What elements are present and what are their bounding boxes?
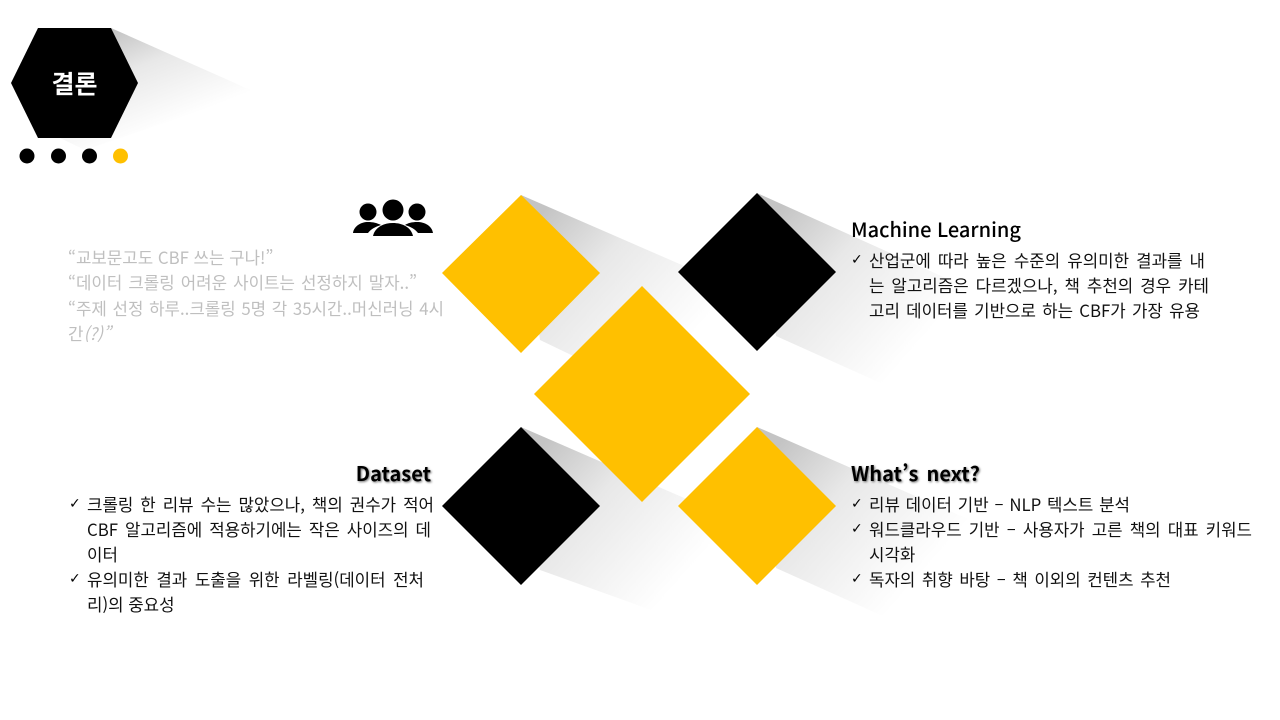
- text block: Machine Learning bullets: ✓: [851, 252, 863, 268]
- diamond: bottom-left black: [442, 427, 600, 585]
- text block: Dataset bullets: CBF 알고리즘에 적용하기에는 작은 사이즈의 데: [87, 517, 431, 541]
- shadow: top-right diamond: [757, 193, 1030, 385]
- text block: Machine Learning bullets: 는 알고리즘은 다르겠으나, 책 추천의 경우 카테: [869, 273, 1209, 297]
- text block: Machine Learning bullets: [851, 248, 1209, 322]
- text block: Dataset bullets: 이터: [87, 542, 118, 566]
- heading: Machine Learning: Machine Learning: [851, 214, 1021, 243]
- text block: Dataset bullets: ✓: [69, 496, 81, 512]
- header hexagon: [11, 28, 138, 138]
- text block: What's next bullets: 시각화: [869, 542, 915, 566]
- text block: What's next bullets: ✓: [851, 496, 863, 512]
- icon: group of people: [353, 200, 433, 236]
- text block: What's next bullets: ✓: [851, 571, 863, 587]
- text block: What's next bullets: ✓: [851, 521, 863, 537]
- heading: What's next?: What’s next?: [851, 458, 980, 487]
- shadow: bottom-right diamond: [757, 427, 1030, 617]
- diamond: top-right black: [678, 193, 836, 351]
- text block: quotes: “교보문고도 CBF 쓰는 구나!”: [68, 245, 273, 269]
- text block: Machine Learning bullets: 고리 데이터를 기반으로 하는 CBF가 가장 유용: [869, 298, 1200, 322]
- text block: Dataset bullets: 크롤링 한 리뷰 수는 많았으나, 책의 권수가 적어: [87, 492, 434, 516]
- shadow: top-left diamond: [521, 195, 790, 400]
- text block: quotes: [68, 245, 444, 345]
- text block: What's next bullets: 리뷰 데이터 기반 – NLP 텍스트 분석: [869, 492, 1130, 516]
- text block: Dataset bullets: 유의미한 결과 도출을 위한 라벨링(데이터 전처: [87, 567, 424, 591]
- diamond: bottom-right yellow: [678, 427, 836, 585]
- shadow: bottom-left diamond: [521, 427, 790, 615]
- heading: Dataset: Dataset: [356, 458, 431, 487]
- text block: Dataset bullets: 리)의 중요성: [87, 592, 175, 616]
- text block: What's next bullets: 워드클라우드 기반 – 사용자가 고른 책의 대표 키워드: [869, 517, 1252, 541]
- text block: What's next bullets: 독자의 취향 바탕 – 책 이외의 컨텐츠 추천: [869, 567, 1171, 591]
- diamond: centre yellow: [534, 286, 750, 502]
- text block: Dataset bullets: [69, 492, 434, 616]
- title: 결론: [51, 65, 98, 101]
- text block: What's next bullets: [851, 492, 1252, 591]
- text block: quotes: “데이터 크롤링 어려운 사이트는 선정하지 말자..”: [68, 270, 417, 294]
- diamond: top-left yellow: [442, 195, 600, 353]
- text block: quotes: 간(?)”: [68, 321, 111, 345]
- text block: Dataset bullets: ✓: [69, 571, 81, 587]
- progress dots: [20, 148, 128, 164]
- shadow: header hexagon: [60, 28, 255, 150]
- text block: quotes: “주제 선정 하루..크롤링 5명 각 35시간..머신러닝 4시: [68, 296, 444, 320]
- text block: Machine Learning bullets: 산업군에 따라 높은 수준의 유의미한 결과를 내: [869, 248, 1205, 272]
